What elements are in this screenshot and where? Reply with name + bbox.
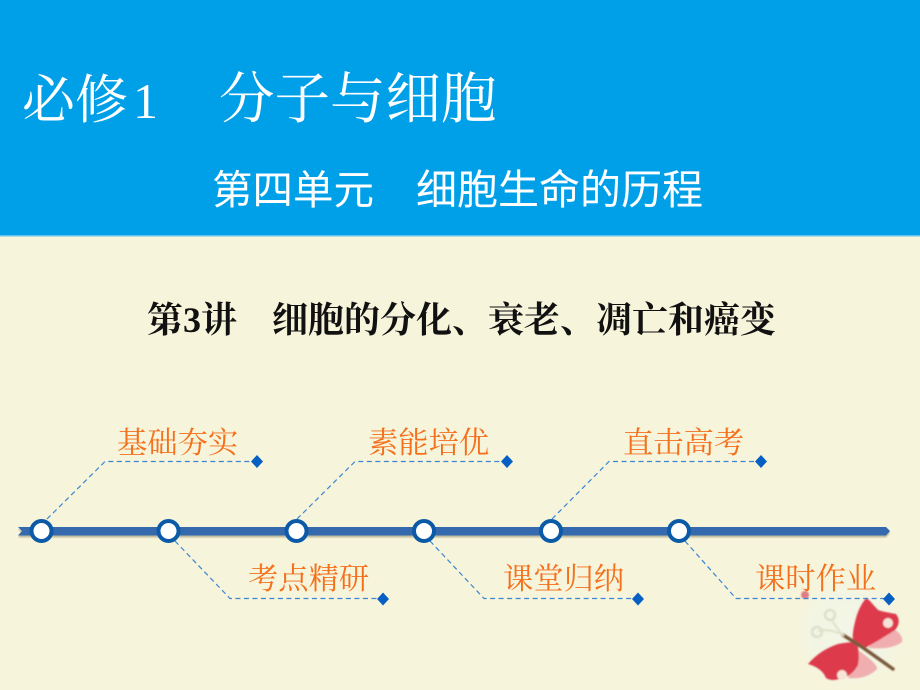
body <box>843 635 893 669</box>
faint glow <box>794 576 906 688</box>
upper wing <box>853 598 899 648</box>
subtitle: 细胞生命的历程: 细胞生命的历程 <box>416 167 703 213</box>
item: 课堂归纳: 课堂归纳 <box>503 562 624 596</box>
item: 素能培优: 素能培优 <box>368 426 489 460</box>
item: 直击高考 <box>541 426 767 541</box>
subtitle: 第四单元: 第四单元 <box>212 167 374 213</box>
item: 直击高考: 直击高考 <box>623 426 744 460</box>
item: 课堂归纳 <box>414 521 644 606</box>
item: 考点精研: 考点精研 <box>248 562 369 596</box>
timeline <box>18 426 895 606</box>
item: 考点精研 <box>158 521 389 606</box>
title: 必修1: 必修1 <box>22 72 158 130</box>
item: 素能培优 <box>286 426 513 541</box>
lower wing <box>808 642 859 680</box>
rear wings <box>868 625 902 648</box>
title: 分子与细胞: 分子与细胞 <box>219 70 497 131</box>
item: 课时作业: 课时作业 <box>755 562 876 596</box>
icon: butterfly <box>794 576 906 688</box>
timeline bar <box>18 527 890 538</box>
panel: blue header band <box>0 0 920 236</box>
antennae <box>818 620 844 636</box>
heading: 细胞的分化、衰老、凋亡和癌变: 细胞的分化、衰老、凋亡和癌变 <box>272 300 777 340</box>
item: 基础夯实 <box>32 426 263 541</box>
item: 基础夯实: 基础夯实 <box>117 426 238 460</box>
item: 课时作业 <box>669 521 895 606</box>
heading: 第3讲: 第3讲 <box>147 300 237 340</box>
small red speck <box>801 591 809 599</box>
